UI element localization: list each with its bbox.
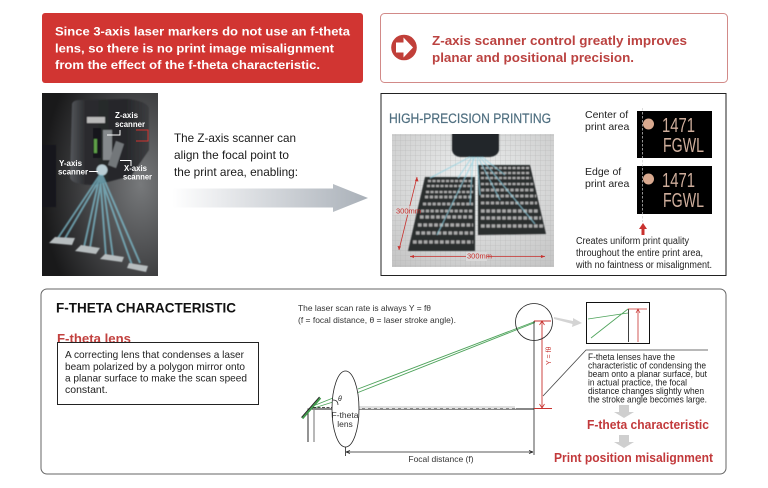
text: z-axis explanation: The Z-axis scanner can — [174, 131, 296, 145]
sample: edge print — [637, 166, 712, 214]
definition box: a planar surface to make the scan speed — [65, 372, 247, 384]
arrow: grey down 1 — [614, 405, 634, 418]
annotation: 300mm dimensions: 300mm — [467, 252, 492, 260]
label: X-axis scanner: scanner — [123, 172, 153, 182]
dimension: Y = f-theta — [534, 321, 553, 408]
inset: magnified focal point — [586, 302, 650, 344]
diagram: f-theta optics — [302, 304, 553, 464]
icon: circled arrow — [391, 35, 417, 60]
label: print position misalignment: Print position misalignment — [554, 450, 714, 465]
arrow: grey to inset — [554, 317, 582, 327]
text: f-theta lens explanation: the stroke angle becomes large. — [588, 394, 707, 404]
label: f-theta characteristic: F-theta characteristic — [587, 417, 709, 432]
label: edge of print area: print area — [585, 178, 630, 190]
definition box: A correcting lens that condenses a laser — [65, 349, 244, 361]
text: z-axis explanation: the print area, enabling: — [174, 165, 298, 179]
magnifier circle — [516, 304, 552, 340]
text: f-theta lens explanation: characteristic of condensing the — [588, 360, 706, 370]
definition box — [58, 342, 258, 404]
heading: f-theta characteristic: F-THETA CHARACTERISTIC — [56, 300, 236, 316]
text: z-axis explanation: align the focal point to — [174, 148, 289, 162]
text: scan rate formula: (f = focal distance, θ = laser stroke angle). — [298, 315, 456, 325]
text: f-theta lens explanation: F-theta lenses have the — [588, 352, 675, 362]
annotation: 300mm dimensions — [394, 177, 545, 261]
sample: edge print: FGWL — [663, 190, 704, 212]
definition box: constant. — [65, 384, 108, 396]
label: center of print area: print area — [585, 121, 630, 133]
photo: trays under laser head — [392, 130, 554, 267]
subheading: f-theta lens: F-theta lens — [57, 331, 131, 346]
arrow: gradient pointing right — [172, 184, 368, 212]
label: Y-axis scanner — [58, 160, 98, 174]
text: scan rate formula: The laser scan rate is always Y = fθ — [298, 303, 431, 313]
text: uniform print quality: throughout the entire print area, — [576, 248, 703, 259]
callout: red statement — [42, 13, 363, 83]
dimension: focal distance: Focal distance (f) — [408, 454, 474, 464]
dimension: Y = f-theta: Y = fθ — [546, 347, 553, 365]
heading: high-precision printing: HIGH-PRECISION PRINTING — [389, 111, 551, 126]
callout: red statement: lens, so there is no print image misalignment — [55, 42, 334, 56]
label: Y-axis scanner: Y-axis — [59, 158, 82, 168]
panel: high-precision printing — [381, 94, 726, 276]
arrow: grey down 2 — [614, 435, 634, 448]
callout leader — [543, 350, 708, 396]
diagram: f-theta optics: F-theta — [332, 410, 359, 420]
label: Z-axis scanner: Z-axis — [115, 110, 138, 120]
arrow: red up — [639, 223, 647, 235]
label: Z-axis scanner: scanner — [115, 119, 146, 129]
text: uniform print quality: Creates uniform print quality — [576, 236, 689, 247]
callout: precision result — [380, 14, 728, 82]
dimension: focal distance — [346, 321, 534, 464]
text: f-theta lens explanation: beam onto a planar surface, but — [588, 369, 707, 379]
callout: red statement: from the effect of the f-theta characteristic. — [55, 58, 320, 72]
text: f-theta lens explanation: in actual practice, the focal — [588, 378, 687, 388]
label: X-axis scanner — [120, 160, 153, 182]
sample: center print — [637, 111, 712, 158]
label: Y-axis scanner: scanner — [58, 166, 89, 176]
diagram: f-theta optics: lens — [337, 419, 353, 429]
sample: edge print: 1471 — [662, 170, 695, 192]
lens ellipse — [332, 371, 359, 447]
text: uniform print quality: with no faintness or misalignment. — [575, 260, 712, 271]
panel: f-theta characteristic — [41, 289, 726, 474]
annotation: 300mm dimensions: 300mm — [396, 206, 421, 216]
text: f-theta lens explanation: distance changes slightly when — [588, 386, 704, 396]
label: Z-axis scanner — [107, 110, 148, 141]
callout: red statement: Since 3-axis laser markers do not use an f-theta — [55, 24, 350, 38]
photo: laser marker with scanners — [38, 93, 158, 276]
label: center of print area: Center of — [585, 109, 628, 121]
sample: center print: FGWL — [663, 135, 704, 157]
callout: precision result: Z-axis scanner control greatly improves — [432, 33, 687, 48]
sample: center print: 1471 — [662, 115, 695, 137]
label: edge of print area: Edge of — [585, 166, 621, 178]
label: X-axis scanner: X-axis — [124, 163, 147, 173]
callout: precision result: planar and positional precision. — [432, 50, 634, 65]
definition box: beam polarized by a polygon mirror onto — [65, 361, 245, 373]
diagram: f-theta optics: θ — [338, 396, 342, 403]
